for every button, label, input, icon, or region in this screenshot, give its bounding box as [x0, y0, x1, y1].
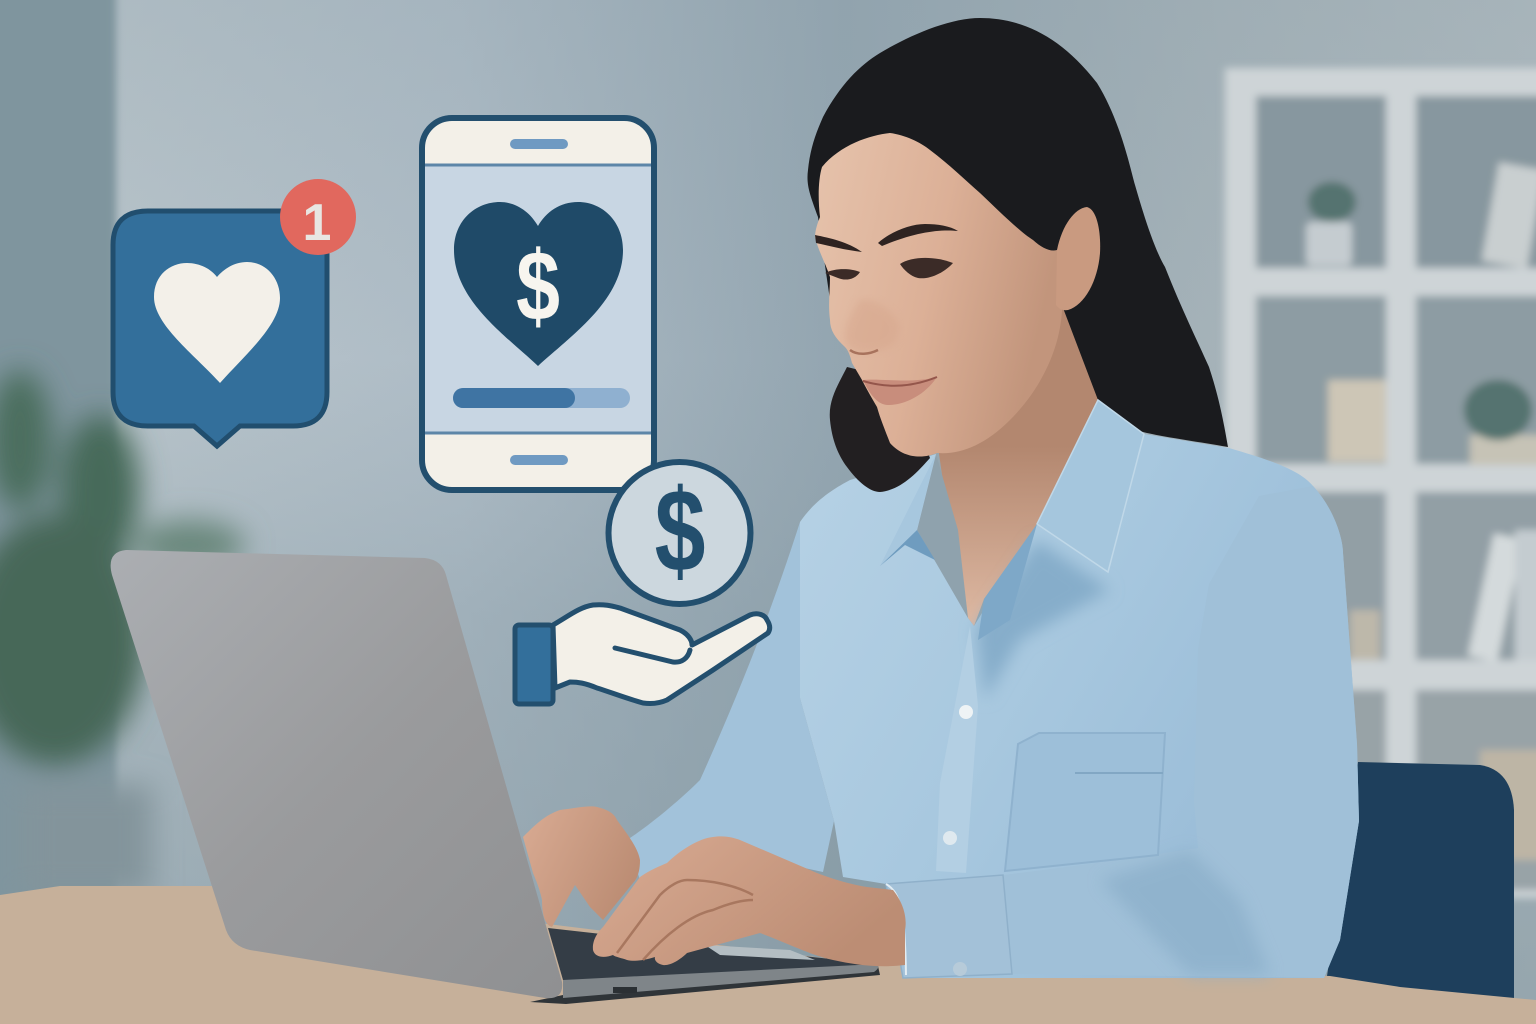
shirt cuff [886, 875, 1012, 978]
pocket [1005, 733, 1165, 871]
eyebrows [815, 235, 862, 252]
left sleeve [627, 522, 834, 880]
nose [845, 300, 899, 352]
collar right [1037, 400, 1144, 572]
face [815, 133, 1062, 457]
icon: phone donation [422, 118, 654, 490]
icon: like notification: 1 [303, 194, 331, 252]
far hand [523, 806, 640, 927]
laptop base and keyboard [530, 928, 880, 1004]
inner collar left [917, 454, 968, 618]
icon: open hand [515, 605, 770, 704]
neck [937, 300, 1098, 626]
icon: like notification [113, 179, 356, 446]
sleeve folds [1100, 850, 1270, 975]
desk [0, 886, 1536, 1024]
collar left [880, 454, 936, 566]
icon: coin [608, 462, 750, 604]
lips [863, 377, 937, 405]
placket [936, 626, 978, 873]
shirt torso [800, 400, 1359, 978]
right arm sleeve [1003, 486, 1359, 978]
shirt shadow under collar [976, 540, 1110, 700]
blurred bookshelf [1225, 68, 1536, 898]
lower hair lock [830, 367, 930, 492]
laptop lid [111, 550, 562, 998]
eyes [900, 258, 953, 278]
icon: coin: $ [655, 466, 705, 597]
ear [1056, 207, 1100, 310]
blurred potted plant [0, 370, 245, 895]
icon: phone donation: $ [516, 231, 560, 342]
hair [807, 18, 1228, 447]
near hand [593, 836, 906, 966]
woman [523, 18, 1359, 978]
office chair [1325, 762, 1514, 1000]
